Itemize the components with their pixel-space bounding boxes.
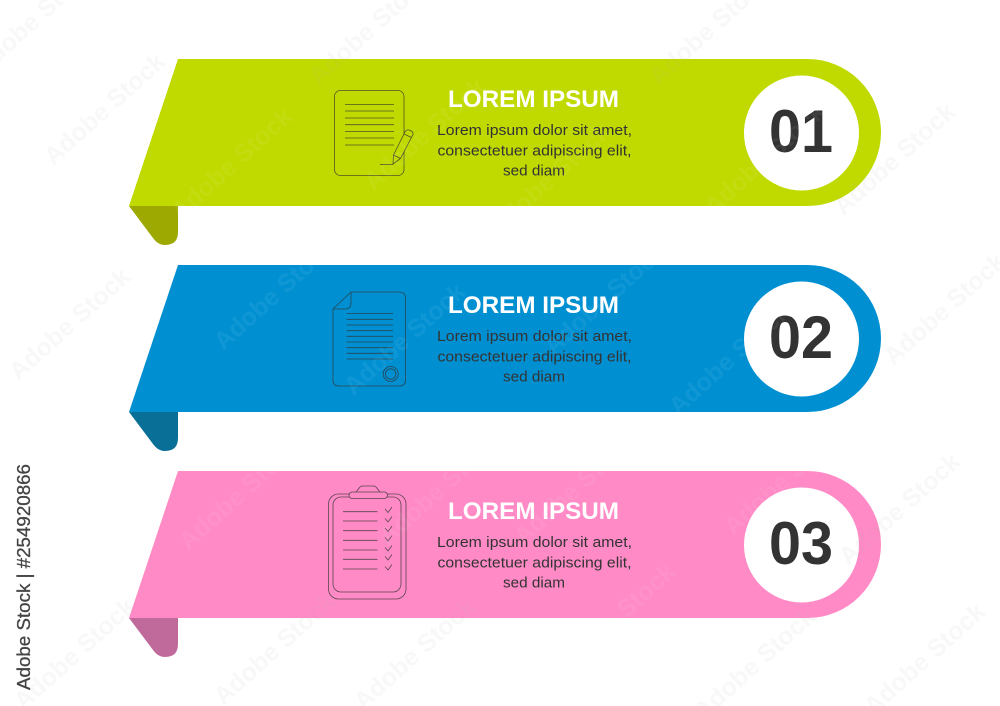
- ribbon body 03: [129, 471, 881, 618]
- body text 03: Lorem ipsum dolor sit amet,: [437, 534, 632, 551]
- watermark: stock image marks: [166, 72, 851, 681]
- heading 02: LOREM IPSUM: [448, 292, 619, 319]
- panel: banner 01: [129, 59, 881, 245]
- watermark: stock image marks: Adobe Stock: [339, 277, 471, 401]
- number badge 03: [744, 488, 859, 602]
- body text 03: [437, 534, 632, 592]
- watermark: stock image marks: Adobe Stock: [359, 72, 491, 196]
- watermark: marks on white background: Adobe Stock: [834, 447, 966, 571]
- icon: document with pencil: [334, 90, 413, 176]
- ribbon fold 03: [129, 618, 178, 657]
- body text 03: sed diam: [503, 574, 565, 592]
- watermark: stock image marks: Adobe Stock: [209, 232, 341, 356]
- watermark: stock image marks: Adobe Stock: [509, 427, 641, 551]
- watermark: stock image marks: Adobe Stock: [166, 102, 298, 226]
- watermark: stock image marks: Adobe Stock: [664, 297, 796, 421]
- watermark: stock image marks: Adobe Stock: [484, 117, 616, 241]
- body text 02: sed diam: [503, 368, 565, 386]
- panel: banner 02: [129, 265, 881, 451]
- number badge 03: 03: [769, 510, 833, 577]
- heading 03: LOREM IPSUM: [448, 498, 619, 525]
- watermark: stock image marks: Adobe Stock: [719, 417, 851, 541]
- body text 01: sed diam: [503, 162, 565, 180]
- ribbon fold 01: [129, 206, 178, 245]
- body text 03: consectetuer adipiscing elit,: [438, 554, 632, 572]
- icon: clipboard checklist: [328, 486, 406, 599]
- number badge 02: 02: [769, 304, 833, 371]
- number badge 01: [744, 76, 859, 190]
- ribbon body 02: [129, 265, 881, 412]
- body text 02: [437, 328, 632, 386]
- watermark: marks on white background: Adobe Stock: [829, 97, 961, 221]
- ribbon fold 02: [129, 412, 178, 451]
- body text 01: consectetuer adipiscing elit,: [438, 142, 632, 160]
- watermark: stock image marks: Adobe Stock: [699, 97, 831, 221]
- number badge 01: 01: [769, 98, 833, 165]
- side credit text: Adobe Stock | #254920866: [14, 464, 34, 690]
- watermark: stock image marks: Adobe Stock: [174, 432, 306, 556]
- ribbon body 01: [129, 59, 881, 206]
- watermark: stock image marks: Adobe Stock: [539, 237, 671, 361]
- watermark: stock image marks: Adobe Stock: [549, 557, 681, 681]
- watermark: marks on white background: Adobe Stock: [4, 262, 136, 386]
- watermark: stock image marks: Adobe Stock: [374, 427, 506, 551]
- heading 01: LOREM IPSUM: [448, 86, 619, 113]
- number badge 02: [744, 282, 859, 396]
- body text 01: [437, 122, 632, 180]
- body text 02: Lorem ipsum dolor sit amet,: [437, 328, 632, 345]
- body text 02: consectetuer adipiscing elit,: [438, 348, 632, 366]
- watermark: marks on white background: Adobe Stock: [39, 47, 171, 171]
- body text 01: Lorem ipsum dolor sit amet,: [437, 122, 632, 139]
- panel: banner 03: [129, 471, 881, 657]
- icon: certificate document: [333, 292, 406, 386]
